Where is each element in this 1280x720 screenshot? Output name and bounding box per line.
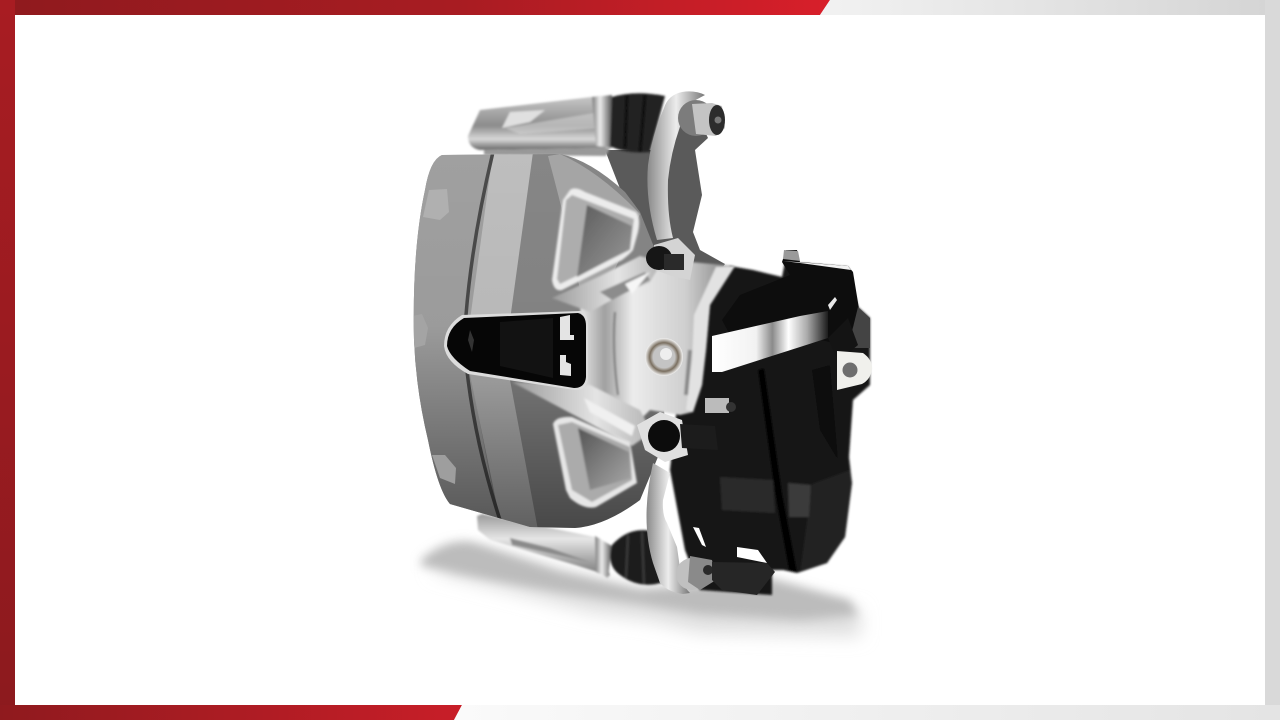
top bracket bolt bbox=[678, 100, 725, 136]
silver strap bbox=[712, 311, 828, 372]
central black slot bbox=[444, 311, 588, 390]
frame: right grey bar bbox=[1265, 0, 1280, 720]
body metal bands bbox=[414, 154, 664, 528]
rear bracket plate bbox=[605, 100, 725, 300]
bracket arm lower bbox=[646, 463, 690, 594]
upper slide pin bbox=[468, 93, 665, 156]
white gaps in lower housing bbox=[693, 527, 767, 563]
lower slide pin bbox=[477, 514, 664, 585]
black pad and piston housing bbox=[670, 262, 870, 595]
brake caliper illustration bbox=[405, 91, 872, 595]
upper window recess bbox=[552, 188, 639, 290]
lower silver wing bbox=[512, 382, 652, 446]
hub collar bbox=[686, 266, 735, 412]
frame: top red bar bbox=[0, 0, 830, 15]
central silver hub bbox=[512, 256, 735, 446]
lower bracket bolt bbox=[676, 556, 716, 590]
body side tabs bbox=[423, 189, 449, 220]
lower window recess bbox=[553, 417, 637, 508]
small screw bbox=[705, 398, 736, 413]
frame: bottom pale bar bbox=[454, 705, 1280, 720]
top bracket arm bbox=[647, 91, 705, 240]
fluid port bbox=[645, 338, 683, 376]
frame: bottom red bar bbox=[0, 705, 462, 720]
upper bleed nut bbox=[646, 238, 695, 280]
spring clip bbox=[722, 250, 860, 345]
upper silver wing bbox=[552, 256, 662, 312]
frame: top grey bar bbox=[820, 0, 1280, 15]
mounting lug bbox=[828, 307, 872, 390]
caliper body bbox=[414, 154, 664, 528]
ground shadow bbox=[421, 541, 860, 636]
frame: left red bar bbox=[0, 0, 15, 720]
sensor connector bbox=[712, 562, 775, 595]
lower bleed nut bbox=[637, 412, 718, 462]
